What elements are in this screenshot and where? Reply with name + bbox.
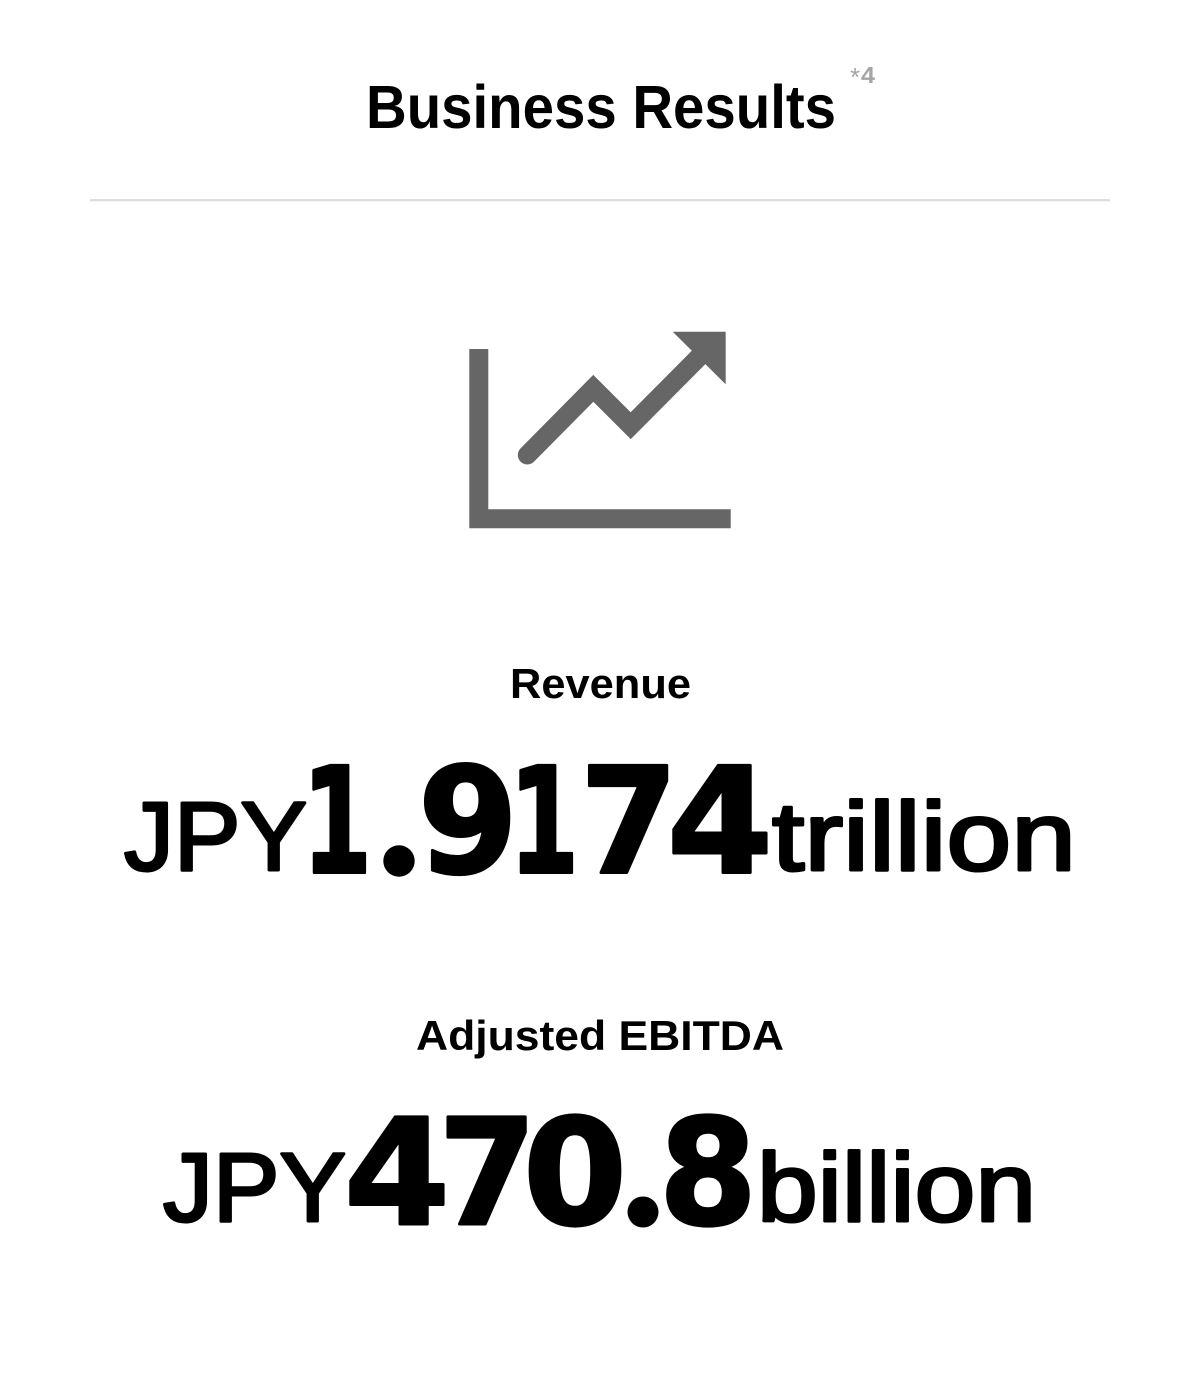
- adjusted EBITDA value: 0: [523, 1088, 627, 1259]
- revenue value: JPY: [124, 782, 307, 891]
- title: 4: [861, 62, 875, 88]
- title: Business Results: [366, 73, 836, 141]
- title: *: [850, 62, 860, 92]
- adjusted EBITDA label: Adjusted EBITDA: [416, 1012, 784, 1059]
- icon: rising line chart: [469, 332, 731, 528]
- adjusted EBITDA value: [163, 1088, 1036, 1259]
- adjusted EBITDA value: JPY: [163, 1133, 346, 1242]
- revenue value: 1: [509, 736, 579, 908]
- revenue value: 4: [667, 736, 773, 908]
- adjusted EBITDA value: 7: [438, 1088, 536, 1259]
- revenue value: [124, 736, 1076, 908]
- revenue value: trillion: [772, 782, 1076, 891]
- revenue value: 7: [580, 736, 678, 908]
- revenue value: 1: [302, 736, 372, 908]
- adjusted EBITDA value: 4: [344, 1088, 450, 1259]
- revenue value: .: [378, 770, 420, 898]
- adjusted EBITDA value: billion: [757, 1133, 1036, 1242]
- revenue label: Revenue: [510, 660, 691, 707]
- revenue value: 9: [418, 736, 518, 908]
- adjusted EBITDA value: 8: [659, 1088, 757, 1259]
- adjusted EBITDA value: .: [622, 1121, 664, 1249]
